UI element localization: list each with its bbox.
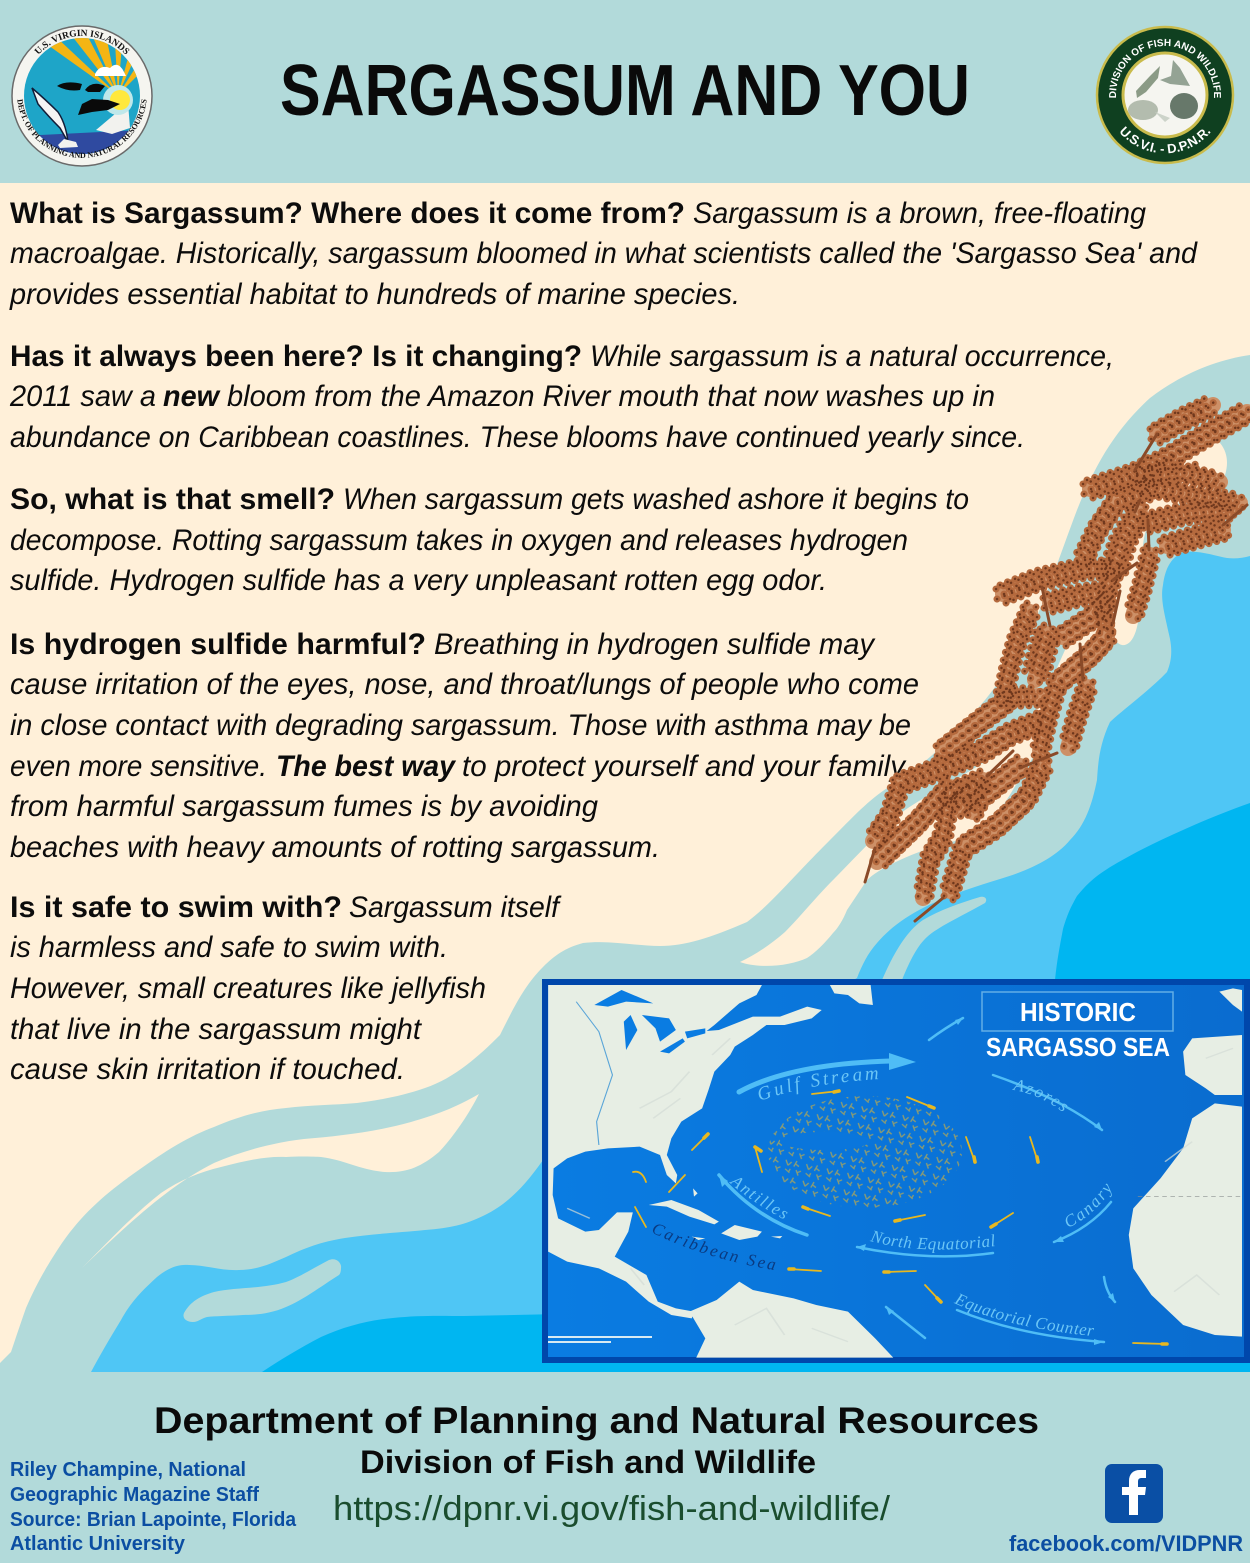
text block: what is sargassum: provides essential habitat to hundreds of marine species.: [9, 278, 740, 311]
text block: what is that smell: [10, 483, 969, 597]
text block: what is sargassum: Sargassum is a brown, free-floating: [693, 197, 1146, 230]
wave: pale streak in blue, upper: [882, 897, 986, 980]
text block: is hydrogen sulfide harmful: cause irritation of the eyes, nose, and throat/lungs of people who come: [10, 668, 919, 701]
facebook address: facebook.com/VIDPNR: [1009, 1531, 1243, 1556]
footer heading: division: Division of Fish and Wildlife: [360, 1444, 816, 1480]
text block: has it always been here: abundance on Caribbean coastlines. These blooms have continued yearly since.: [10, 421, 1025, 454]
text block: has it always been here: bloom from the Amazon River mouth that now washes up in: [227, 380, 995, 413]
text block: is hydrogen sulfide harmful: beaches with heavy amounts of rotting sargassum.: [10, 831, 660, 864]
image credits: Geographic Magazine Staff: [10, 1484, 259, 1506]
wave: mid blue: [91, 552, 1250, 1372]
map labels: Antilles: [729, 1178, 788, 1218]
image credits: Source: Brian Lapointe, Florida: [10, 1509, 297, 1531]
map relief shading: [567, 1038, 1233, 1342]
map labels: Azores: [1012, 1080, 1068, 1111]
wave: pale teal band: [0, 355, 1250, 1372]
text block: what is sargassum: macroalgae. Historically, sargassum bloomed in what scientists called the 'Sargasso Sea' and: [10, 237, 1198, 270]
text block: is it safe to swim with: [10, 891, 562, 1086]
text block: is it safe to swim with: Is it safe to swim with?: [10, 891, 342, 924]
panel: footer bar: [0, 1372, 1250, 1563]
text block: has it always been here: [9, 340, 1114, 454]
icon: facebook: [1105, 1464, 1163, 1523]
map labels: Gulf Stream: [758, 1070, 878, 1100]
map labels: North Equatorial: [870, 1230, 995, 1253]
text block: what is that smell: sulfide. Hydrogen sulfide has a very unpleasant rotten egg odor.: [10, 564, 827, 597]
text block: is it safe to swim with: is harmless and safe to swim with.: [10, 931, 448, 964]
text block: is hydrogen sulfide harmful: [10, 628, 919, 864]
wave: cream sliver lower left: [82, 1094, 479, 1268]
text block: is hydrogen sulfide harmful: Is hydrogen sulfide harmful?: [10, 628, 426, 661]
text block: what is sargassum: [9, 197, 1198, 311]
wave: deep blue: [262, 803, 1250, 1372]
text block: is hydrogen sulfide harmful: Breathing in hydrogen sulfide may: [434, 628, 876, 661]
text block: is it safe to swim with: Sargassum itself: [349, 891, 562, 924]
image credits: Riley Champine, National: [10, 1459, 246, 1481]
sargasso sea patch: [768, 1096, 962, 1208]
text block: is hydrogen sulfide harmful: to protect yourself and your family: [462, 750, 907, 783]
text block: what is that smell: decompose. Rotting sargassum takes in oxygen and releases hydrogen: [10, 524, 908, 557]
text block: has it always been here: Has it always been here? Is it changing?: [10, 340, 582, 373]
text block: is hydrogen sulfide harmful: in close contact with degrading sargassum. Those with asthma may be: [10, 709, 911, 742]
text block: has it always been here: While sargassum is a natural occurrence,: [590, 340, 1114, 373]
map: North Atlantic currents: [542, 979, 1250, 1363]
text block: is hydrogen sulfide harmful: The best way: [276, 750, 456, 783]
illustration: sargassum branch: [865, 396, 1250, 921]
image credits: Atlantic University: [10, 1533, 186, 1555]
text block: has it always been here: new: [163, 380, 221, 413]
map labels: Caribbean Sea: [652, 1224, 776, 1270]
text block: what is sargassum: What is Sargassum? Where does it come from?: [10, 197, 685, 230]
text block: what is that smell: So, what is that smell?: [10, 483, 335, 516]
panel: header bar: [0, 0, 1250, 183]
map frame and ocean: [545, 982, 1247, 1360]
text block: what is that smell: When sargassum gets washed ashore it begins to: [343, 483, 969, 516]
icon: Division of Fish and Wildlife seal: U.S.V.I. - D.P.N.R.: [1120, 126, 1210, 154]
icon: Department of Planning and Natural Resources seal: DEPT. OF PLANNING AND NATURAL RESOURCES: [17, 98, 146, 158]
callout: historic sargasso sea: [982, 992, 1173, 1062]
wave: cream channel under sargassum: [740, 433, 1227, 966]
panel: cream background: [0, 183, 1250, 1373]
map labels: [652, 1070, 1112, 1336]
callout: historic sargasso sea: HISTORIC: [1020, 997, 1136, 1027]
map lakes and rivers: [576, 990, 1242, 1197]
text block: is hydrogen sulfide harmful: from harmful sargassum fumes is by avoiding: [10, 790, 598, 823]
footer heading: department: Department of Planning and Natural Resources: [154, 1400, 1039, 1441]
wave: pale blob lower left: [183, 1259, 341, 1322]
map labels: Canary: [1066, 1184, 1112, 1226]
callout: historic sargasso sea: SARGASSO SEA: [986, 1032, 1170, 1062]
text block: is it safe to swim with: However, small creatures like jellyfish: [10, 972, 486, 1005]
title: SARGASSUM AND YOU: [280, 51, 970, 131]
map land masses: [548, 985, 1242, 1358]
icon: Division of Fish and Wildlife seal: DIVISION OF FISH AND WILDLIFE: [1109, 38, 1221, 98]
map scale bar: [548, 1337, 652, 1342]
ocean waves background: [0, 355, 1250, 1372]
image credits: [10, 1459, 297, 1555]
text block: is hydrogen sulfide harmful: even more sensitive.: [10, 750, 267, 783]
text block: is it safe to swim with: that live in the sargassum might: [10, 1013, 423, 1046]
icon: Division of Fish and Wildlife seal: [1096, 26, 1234, 164]
footer website link: https://dpnr.vi.gov/fish-and-wildlife/: [333, 1490, 891, 1528]
map labels: Equatorial Counter: [954, 1294, 1094, 1336]
text block: is it safe to swim with: cause skin irritation if touched.: [10, 1053, 405, 1086]
ocean current arrows: [719, 1018, 1115, 1345]
text block: has it always been here: 2011 saw a: [9, 380, 156, 413]
icon: Department of Planning and Natural Resources seal: U.S. VIRGIN ISLANDS: [34, 30, 130, 54]
sargassum drift arrows: [633, 1091, 1167, 1344]
icon: Department of Planning and Natural Resources seal: [11, 25, 153, 167]
